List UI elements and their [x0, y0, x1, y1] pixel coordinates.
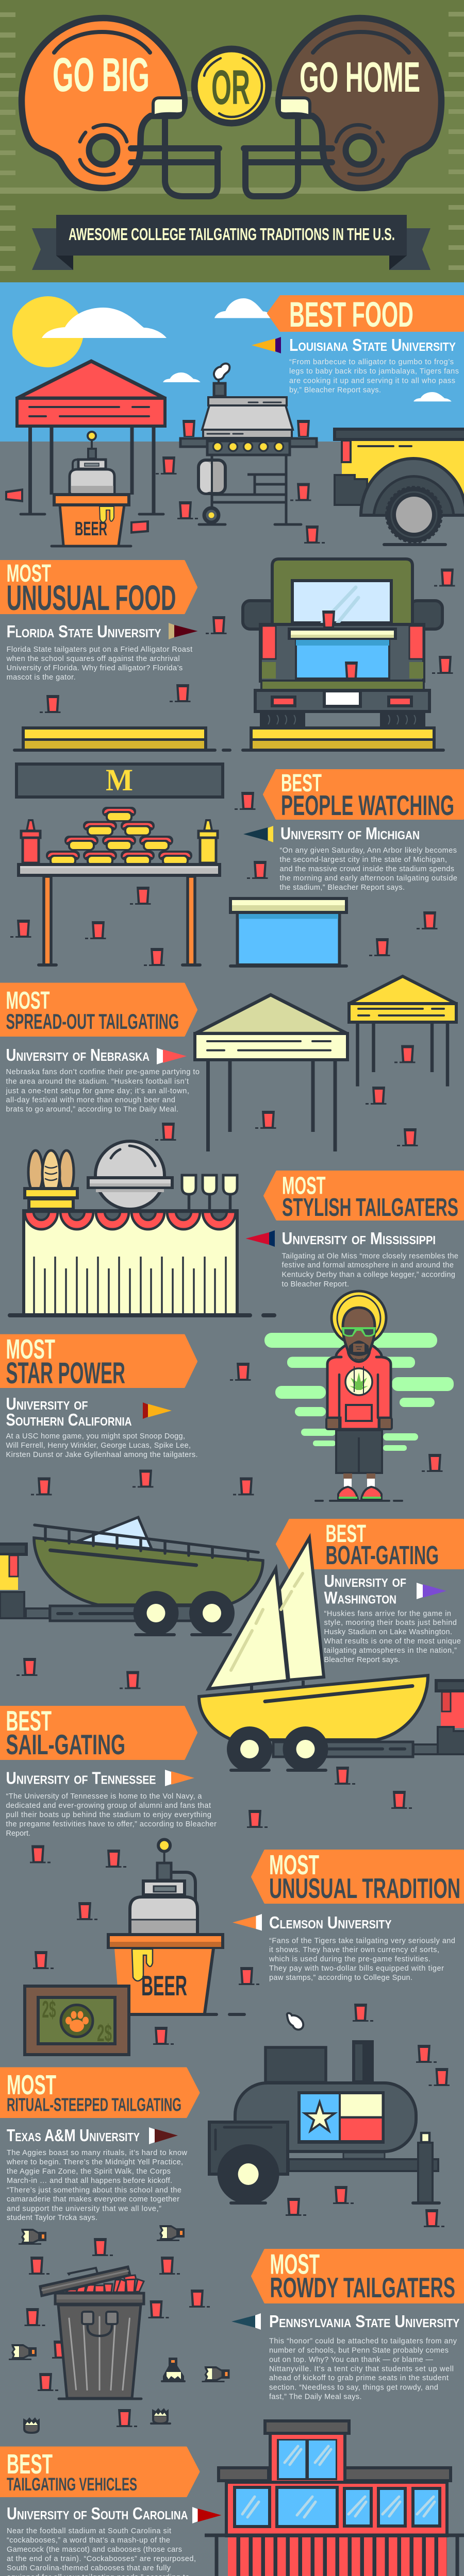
- panel: most spread-out tailgating: [0, 984, 200, 1114]
- mustard bottle: [198, 820, 218, 863]
- body text: At a USC home game, you might spot Snoop Dogg,: [6, 1432, 185, 1440]
- heading banner: BEST: [281, 770, 322, 797]
- body text: which is used during the pre-game festivities.: [269, 1955, 430, 1963]
- body text: where to begin. There’s the Midnight Yell Practice,: [6, 2158, 183, 2166]
- body text: They pay with two-dollar bills equipped with tiger: [269, 1964, 444, 1973]
- illustration: BBQ smoker with Texas flag: [209, 2013, 439, 2204]
- illustration: bread, cloche and buffet table: [10, 1141, 274, 1315]
- pennant: USC: [143, 1402, 172, 1419]
- university name: Clemson University: [269, 1913, 392, 1932]
- body text: fast,” The Daily Meal says.: [269, 2393, 362, 2401]
- panel: best food: [252, 295, 463, 394]
- illustration: beer keg in bucket: [52, 432, 131, 546]
- ketchup bottle: [21, 820, 40, 863]
- body text: The Aggies boast so many rituals, it’s hard to know: [7, 2149, 188, 2157]
- body text: [5, 1068, 200, 1114]
- illustration: framed two dollar bill with paw: 2$: [97, 2020, 112, 2046]
- body text: [6, 1432, 198, 1459]
- body text: ahead of kickoff to grab prime seats in the student: [269, 2374, 449, 2382]
- illustration: framed two dollar bill with paw: 2$: [42, 1996, 56, 2023]
- panel: most star power: [0, 1334, 198, 1459]
- hands: [326, 1418, 339, 1429]
- body text: “The University of Tennessee is home to the Vol Navy, a: [6, 1792, 202, 1801]
- body text: South Carolina-themed cabooses that are fully: [7, 2564, 171, 2572]
- scattered red cups: [5, 456, 455, 2427]
- body text: style, mooring their boats just behind: [324, 1619, 457, 1627]
- illustration: rapper with smoke: [264, 1291, 454, 1501]
- university name: University of: [6, 1394, 88, 1413]
- icon: yellow coin with OR: [194, 49, 269, 123]
- windows: [235, 2487, 440, 2527]
- illustration: big beer keg in bucket: [108, 1839, 244, 2014]
- heading banner: SAIL-GATING: [6, 1728, 125, 1760]
- body text: and the massive crowd inside the stadium spends: [279, 865, 454, 873]
- body text: [269, 1937, 455, 1982]
- green smoke: [264, 1333, 454, 1451]
- body text: March-in … and that all happens before kickoff.: [7, 2177, 172, 2185]
- body text: the Aggie Fan Zone, the Spirit Walk, the Corps: [7, 2167, 171, 2176]
- university name: University of South Carolina: [7, 2504, 188, 2523]
- pennant: FSU: [169, 623, 198, 639]
- hoodie: [327, 1345, 391, 1429]
- panel: most unusual food: [0, 560, 198, 682]
- body text: Bleacher Report says.: [324, 1656, 400, 1664]
- baguettes in basket: [25, 1150, 77, 1209]
- pennant: Washington: [417, 1583, 446, 1599]
- body text: [279, 846, 457, 892]
- heading banner: MOST: [6, 1334, 55, 1365]
- body text: are cooking it up and serving it to all who pass: [289, 377, 455, 385]
- heading banner: MOST: [7, 560, 51, 587]
- icon: sun: [12, 296, 84, 367]
- body text: [289, 358, 459, 394]
- heading banner: BEST: [326, 1520, 366, 1548]
- icon: orange football helmet: [22, 18, 219, 196]
- illustration: red tent: [17, 361, 165, 514]
- heading banner: [0, 1705, 196, 1760]
- heading banner: MOST: [7, 2070, 56, 2100]
- pennant: Penn State: [231, 2313, 261, 2330]
- pennant: Michigan: [243, 826, 273, 842]
- cloche: [88, 1141, 172, 1209]
- body text: brats to go around,” according to The Daily Meal.: [6, 1106, 178, 1114]
- illustration: rear view of green truck with window: [243, 559, 442, 727]
- pennant: South Carolina: [192, 2507, 221, 2523]
- body text: the second-largest city in the state of Michigan,: [279, 856, 447, 864]
- broken bottles: [9, 2225, 230, 2434]
- body text: “Fans of the Tigers take tailgating very seriously and: [269, 1937, 455, 1945]
- university name: Texas A&M University: [7, 2126, 140, 2145]
- body text: Nebraska fans don’t confine their pre-game partying to: [6, 1068, 200, 1076]
- university name: University of Nebraska: [6, 1045, 150, 1064]
- body text: to Bleacher Report.: [281, 1280, 349, 1289]
- body text: the area around the stadium. “Huskers football isn’t: [6, 1078, 189, 1086]
- face with sunglasses and beard: [341, 1308, 376, 1362]
- body text: Near the football stadium at South Carolina sit: [7, 2527, 171, 2535]
- shorts: [336, 1430, 382, 1473]
- body text: when the school squares off against the archrival: [6, 655, 180, 663]
- illustration: ivory tent: [195, 995, 347, 1151]
- body text: camaraderie that makes everyone come together: [7, 2195, 179, 2204]
- pennant: LSU: [252, 337, 281, 353]
- illustration: red caboose: [205, 2421, 464, 2576]
- pennant: Texas A&M: [149, 2127, 178, 2144]
- body text: festive and formal atmosphere in and around the: [281, 1261, 454, 1269]
- heading banner: BEST: [7, 2449, 53, 2480]
- heading banner: [0, 1334, 196, 1390]
- university name: [324, 1571, 406, 1607]
- hoodie logo: [345, 1366, 372, 1395]
- cupola: [265, 2421, 349, 2482]
- heading banner: [264, 1172, 463, 1222]
- body text: Nittanyville. It’s a tent city that students set up well: [269, 2365, 454, 2373]
- university name: Washington: [324, 1588, 396, 1607]
- heading banner: MOST: [282, 1173, 326, 1199]
- header: football field background: [0, 0, 464, 283]
- Texas flag: [299, 2093, 383, 2142]
- panel: most rowdy tailgaters: [231, 2248, 463, 2401]
- body text: “From barbecue to alligator to gumbo to frog’s: [289, 358, 454, 366]
- body text: [7, 2527, 196, 2576]
- illustration: blue cooler: [230, 899, 346, 966]
- body text: [324, 1609, 461, 1664]
- smoke: [287, 2013, 303, 2030]
- panel: best tailgating vehicles: [0, 2448, 221, 2576]
- cups in the can: [66, 2275, 144, 2292]
- body text: mascot is the gator.: [7, 673, 76, 682]
- heading banner: MOST: [6, 987, 49, 1014]
- body text: Gamecock (the mascot) and cabooses (those cars: [7, 2546, 182, 2554]
- body text: it shows. They have their own currency of sorts,: [269, 1946, 439, 1954]
- illustration: yellow truck rear towing boat: [0, 1544, 26, 1618]
- heading banner: [277, 1520, 463, 1570]
- body text: University of Florida. Why fried alligator? Florida’s: [7, 664, 183, 672]
- body text: the morning and early afternoon tailgating outside: [279, 874, 457, 883]
- lid: [40, 2267, 130, 2296]
- body text: number of schools, but Penn State probably comes: [269, 2346, 449, 2354]
- body text: This “honor” could be attached to tailgaters from any: [269, 2337, 457, 2346]
- pennant: Nebraska: [157, 1048, 187, 1064]
- body text: Husky Stadium on Lake Washington.: [324, 1628, 452, 1636]
- pennant: Clemson: [233, 1914, 262, 1931]
- university name: University of Tennessee: [6, 1768, 156, 1788]
- body text: by,” Bleacher Report says.: [289, 386, 381, 394]
- body text: at the end of a train). “Cockabooses” are repurposed,: [7, 2555, 196, 2563]
- pennant: Tennessee: [165, 1770, 194, 1786]
- headwrap: [332, 1291, 386, 1345]
- heading banner: MOST: [270, 2248, 320, 2280]
- illustration: framed two dollar bill with paw: [25, 1986, 129, 2055]
- body text: What results is one of the most unique: [324, 1637, 461, 1646]
- body text: student Taylor Trcka says.: [7, 2214, 97, 2222]
- heading banner: [0, 2068, 199, 2117]
- champagne glasses: [182, 1175, 237, 1210]
- heading banner: BEST: [6, 1705, 52, 1737]
- body text: legs to baby back ribs to jambalaya, Tigers fans: [289, 367, 459, 376]
- university name: University of Mississippi: [281, 1229, 436, 1248]
- illustration: olive motor boat on trailer: [26, 1517, 263, 1635]
- heading banner: SPREAD-OUT TAILGATING: [6, 1009, 179, 1033]
- heading banner: [0, 560, 196, 618]
- body text: [269, 2337, 457, 2401]
- body text: “cockabooses,” a word that’s a mash-up of the: [7, 2536, 170, 2545]
- heading banner: MOST: [269, 1850, 319, 1880]
- body text: the stadium,” Bleacher Report says.: [279, 884, 405, 892]
- heading banner: UNUSUAL FOOD: [7, 578, 176, 618]
- icon: yellow coin with OR: OR: [211, 60, 250, 115]
- heading banner: TAILGATING VEHICLES: [7, 2475, 137, 2495]
- illustration: yellow tent: [349, 976, 456, 1087]
- heading banner: [0, 984, 196, 1036]
- panel: best boat-gating: [277, 1520, 463, 1664]
- university name: University of: [324, 1571, 406, 1590]
- illustration: beer keg in bucket: BEER: [75, 518, 107, 540]
- body text: Tailgating at Ole Miss “more closely resembles the: [281, 1252, 458, 1260]
- icon: brown football helmet: [244, 18, 441, 196]
- illustration: yellow sailboat on trailer: [199, 1538, 438, 1772]
- title: go big: GO BIG: [53, 48, 150, 101]
- body text: all-day festival with more than enough beer and: [6, 1096, 175, 1105]
- body text: Florida State tailgaters put on a Fried Alligator Roast: [7, 646, 192, 654]
- body text: dedicated and ever-growing group of alumni and fans that: [6, 1802, 211, 1810]
- subtitle ribbon: [32, 215, 430, 270]
- sign with Michigan M: M: [106, 763, 133, 797]
- panel: best sail-gating: [0, 1705, 217, 1838]
- heading banner: [252, 1850, 463, 1904]
- legs and shoes: [343, 1473, 375, 1479]
- body text: [281, 1252, 458, 1289]
- panel: best people watching: [243, 770, 463, 892]
- body text: Kentucky Derby than a college kegger,” according: [281, 1271, 455, 1279]
- tablecloth: [10, 1211, 274, 1315]
- body text: Kirsten Dunst or Jake Gyllenhaal among the tailgaters.: [6, 1451, 198, 1459]
- body text: out on top. Why? You can thank — or blame —: [269, 2356, 433, 2364]
- university name: [6, 1394, 132, 1429]
- body text: “On any given Saturday, Ann Arbor likely becomes: [279, 846, 457, 855]
- body text: Will Ferrell, Henry Winkler, George Lucas, Spike Lee,: [6, 1442, 191, 1450]
- icon: tiger paw: [65, 2011, 89, 2032]
- university name: Florida State University: [7, 622, 161, 641]
- body text: just a one-tent setup for game day; it’s an all-town,: [5, 1087, 189, 1095]
- illustration: big beer keg in bucket: BEER: [141, 1970, 187, 2002]
- illustration: overflowing trash can: [40, 2267, 144, 2399]
- body text: section. “Needless to say, things get rowdy, and: [269, 2384, 438, 2392]
- body text: the pregame festivities have to offer,” according to Bleacher: [6, 1820, 217, 1828]
- heading banner: STAR POWER: [6, 1357, 125, 1390]
- sign with Michigan M: [16, 763, 223, 797]
- panel: most ritual-steeped tailgating: [0, 2068, 199, 2222]
- panel: most unusual tradition: [233, 1850, 463, 1982]
- university name: Southern California: [6, 1410, 132, 1429]
- heading banner: [252, 2248, 463, 2303]
- pennant: Ole Miss: [245, 1230, 275, 1247]
- body text: “Huskies fans arrive for the game in: [324, 1609, 451, 1618]
- body text: “There’s just something about this school and the: [7, 2186, 181, 2194]
- icon: clouds: [42, 298, 452, 401]
- illustration: hot dog table: [16, 763, 223, 965]
- heading banner: [0, 2448, 199, 2496]
- body text: [6, 646, 192, 682]
- body text: Report.: [6, 1829, 30, 1838]
- illustration: yellow stage boxes: [14, 728, 443, 750]
- illustration: red truck rear towing sailboat: [436, 1681, 464, 1754]
- panel: most stylish tailgaters: [245, 1172, 463, 1289]
- illustration: yellow truck side: [335, 429, 464, 545]
- body text: pull their boats up behind the stadium to enjoy everything: [6, 1811, 211, 1819]
- body text: tailgating atmospheres in the nation,”: [324, 1647, 457, 1655]
- body text: and support the university that we all love,”: [7, 2205, 161, 2213]
- heading banner: RITUAL-STEEPED TAILGATING: [7, 2094, 181, 2115]
- illustration: gas grill: [180, 364, 317, 524]
- body text: [6, 2149, 188, 2222]
- university name: University of Michigan: [280, 824, 420, 843]
- heading banner: [264, 770, 463, 821]
- body text: paw stamps,” according to College Spun.: [269, 1974, 412, 1982]
- body text: [6, 1792, 217, 1838]
